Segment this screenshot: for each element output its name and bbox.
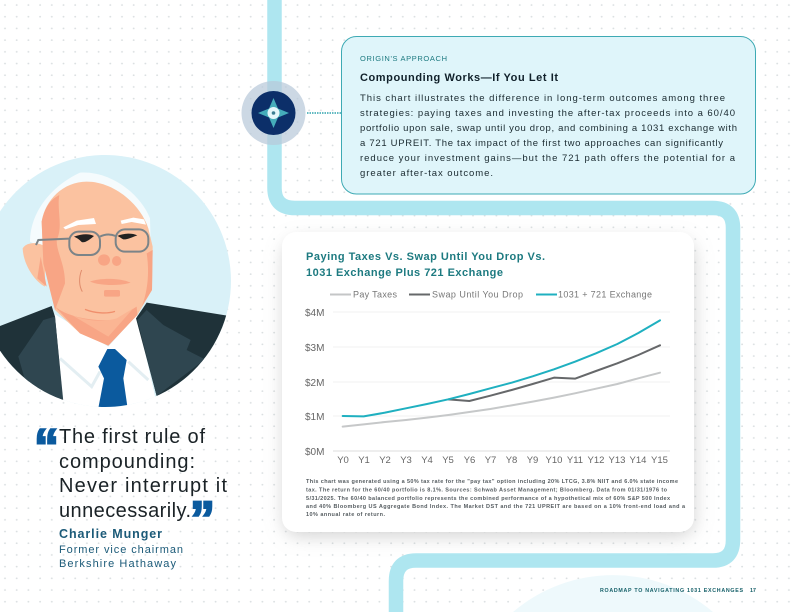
icon: closing quote mark: ” — [190, 491, 215, 547]
face shadows — [42, 195, 65, 310]
line: 1031 + 721 exchange — [343, 320, 660, 416]
line: swap until you drop — [448, 345, 660, 401]
line chart: $2M — [305, 378, 324, 389]
line chart: Y3 — [400, 455, 412, 466]
line chart: Y6 — [464, 455, 475, 466]
quote text: Never interrupt it — [59, 475, 227, 497]
chart title: Paying Taxes Vs. Swap Until You Drop Vs. — [306, 251, 545, 263]
body text — [360, 93, 737, 179]
eyes — [74, 234, 94, 242]
ear — [23, 243, 45, 287]
eyebrows — [63, 218, 96, 229]
footer: ROADMAP TO NAVIGATING 1031 EXCHANGES — [600, 588, 743, 594]
line chart: Y14 — [630, 455, 646, 466]
line chart: Y12 — [588, 455, 604, 466]
quote text — [59, 426, 227, 522]
footnote: 5/31/2025. The 60/40 balanced portfolio represents the combined performance of a hypothetical mix of 60% S&P 500 Index — [306, 496, 671, 502]
body text: strategies: paying taxes and investing the after-tax proceeds into a 60/40 — [360, 108, 735, 119]
line chart: $1M — [305, 412, 324, 423]
body text: reduce your investment gains—but the 721 path offers the potential for a — [360, 153, 736, 164]
line chart: Y9 — [527, 455, 538, 466]
quote — [34, 419, 227, 570]
quote text: unnecessarily. — [59, 500, 191, 522]
attribution: Berkshire Hathaway — [59, 558, 176, 570]
line: pay taxes — [343, 373, 660, 427]
line chart: Y8 — [506, 455, 517, 466]
line chart: Y10 — [546, 455, 562, 466]
body text: This chart illustrates the difference in long-term outcomes among three — [360, 93, 725, 104]
line chart: Y2 — [379, 455, 391, 466]
legend: Swap Until You Drop — [432, 290, 523, 300]
faint circle behind footer — [513, 575, 713, 612]
footnote: 10% annual rate of return. — [306, 512, 385, 518]
line chart: Y11 — [567, 455, 583, 466]
footnote: This chart was generated using a 50% tax rate for the "pay tax" option including 20% LTCG, 3.8% NIIT and 6.0% state income — [306, 479, 678, 485]
body text: portfolio upon sale, swap until you drop, and combining a 1031 exchange with — [360, 123, 737, 134]
quote text: compounding: — [59, 451, 195, 473]
attribution: Former vice chairman — [59, 544, 183, 556]
jacket — [0, 306, 63, 400]
shirt — [53, 313, 157, 413]
footnote: and 40% Bloomberg US Aggregate Bond Index. The Market DST and the 721 UPREIT are based on a 10% front-end load and a — [306, 504, 686, 510]
line chart: $4M — [305, 308, 324, 319]
line chart: Y5 — [442, 455, 454, 466]
line chart — [305, 308, 670, 466]
footnote — [306, 479, 686, 518]
quote text: The first rule of — [59, 426, 205, 448]
line chart: Y13 — [609, 455, 625, 466]
chart title — [306, 251, 545, 279]
legend — [330, 290, 652, 300]
body text: greater after-tax outcome. — [360, 168, 493, 179]
mouth and creases — [90, 279, 131, 285]
nose — [98, 254, 110, 266]
hair — [30, 173, 151, 247]
dotted connector — [307, 112, 341, 114]
line chart: Y1 — [358, 455, 370, 466]
icon: compass marker — [242, 81, 306, 145]
line chart: Y4 — [421, 455, 433, 466]
line chart: Y7 — [485, 455, 496, 466]
icon: opening quote mark: “ — [34, 419, 59, 475]
panel: origin's approach — [342, 36, 756, 194]
tie — [98, 349, 128, 407]
footnote: tax. The return for the 60/40 portfolio is 8.1%. Sources: Schwab Asset Management; Bloomberg. Data from 01/31/1976 to — [306, 488, 668, 494]
line chart: $3M — [305, 343, 324, 354]
legend: 1031 + 721 Exchange — [558, 290, 652, 300]
panel: chart card — [282, 232, 694, 532]
glasses — [36, 229, 148, 255]
portrait: Charlie Munger — [0, 155, 233, 413]
chart title: 1031 Exchange Plus 721 Exchange — [306, 267, 503, 279]
footer: 17 — [750, 588, 756, 594]
card shadow — [284, 240, 694, 536]
body text: a 721 UPREIT. The tax impact of the first two approaches can significantly — [360, 138, 723, 149]
line chart: Y0 — [337, 455, 349, 466]
line chart: $0M — [305, 447, 324, 458]
attribution: Charlie Munger — [59, 527, 162, 541]
legend: Pay Taxes — [353, 290, 398, 300]
heading: Compounding Works—If You Let It — [360, 72, 558, 84]
road path — [274, 0, 733, 612]
attribution — [59, 527, 183, 570]
eyebrow: ORIGIN'S APPROACH — [360, 54, 447, 63]
head — [42, 182, 153, 346]
line chart: Y15 — [651, 455, 668, 466]
